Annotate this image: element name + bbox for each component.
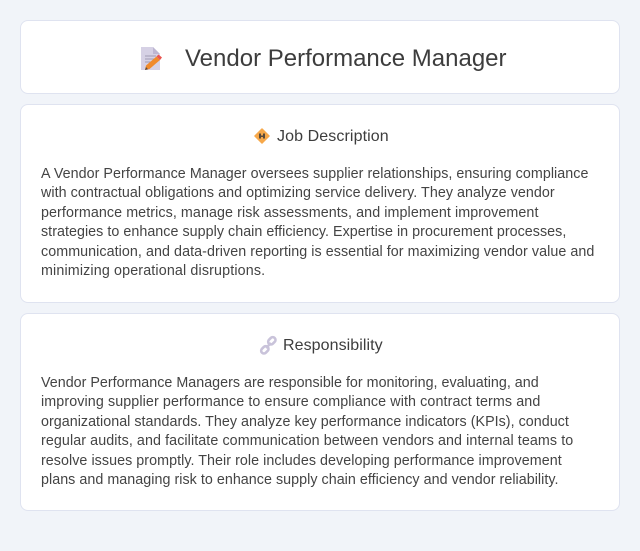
icon: diamond sign (254, 128, 270, 144)
text block: responsibility: organizational standards. They analyze key performance indicators (KPIs), conduct (41, 414, 569, 430)
text block: responsibility: Vendor Performance Managers are responsible for monitoring, evaluating, and (41, 375, 539, 391)
title: Vendor Performance Manager (185, 45, 507, 72)
text block: responsibility: improving supplier performance to ensure compliance with contract terms and (41, 394, 540, 410)
text block: job description: performance metrics, manage risk assessments, and implement improvement (41, 205, 539, 221)
text block: responsibility: plans and managing risk to enhance supply chain efficiency and vendor reliability. (41, 472, 559, 488)
heading: responsibility: Responsibility (283, 337, 383, 354)
panel: responsibility (20, 313, 620, 511)
heading: job description: Job Description (277, 128, 389, 145)
text block: responsibility: regular audits, and facilitate communication between vendors and internal teams to (41, 433, 573, 449)
icon: document with pencil (141, 47, 162, 70)
text block: job description: A Vendor Performance Manager oversees supplier relationships, ensuring compliance (41, 166, 588, 182)
text block: job description: with contractual obligations and optimizing service delivery. They analyze vendor (41, 185, 555, 201)
text block: job description: strategies to enhance supply chain efficiency. Expertise in procurement processes, (41, 224, 566, 240)
panel: job description (20, 104, 620, 303)
panel: title card (20, 20, 620, 94)
text block: responsibility (41, 375, 573, 488)
text block: job description: communication, and data-driven reporting is essential for maximizing vendor value and (41, 244, 594, 260)
text block: responsibility: resolve issues promptly. Their role includes developing performance improvement (41, 453, 562, 469)
text block: job description: minimizing operational disruptions. (41, 263, 265, 279)
icon: chain link (260, 336, 277, 355)
text block: job description (41, 166, 594, 279)
